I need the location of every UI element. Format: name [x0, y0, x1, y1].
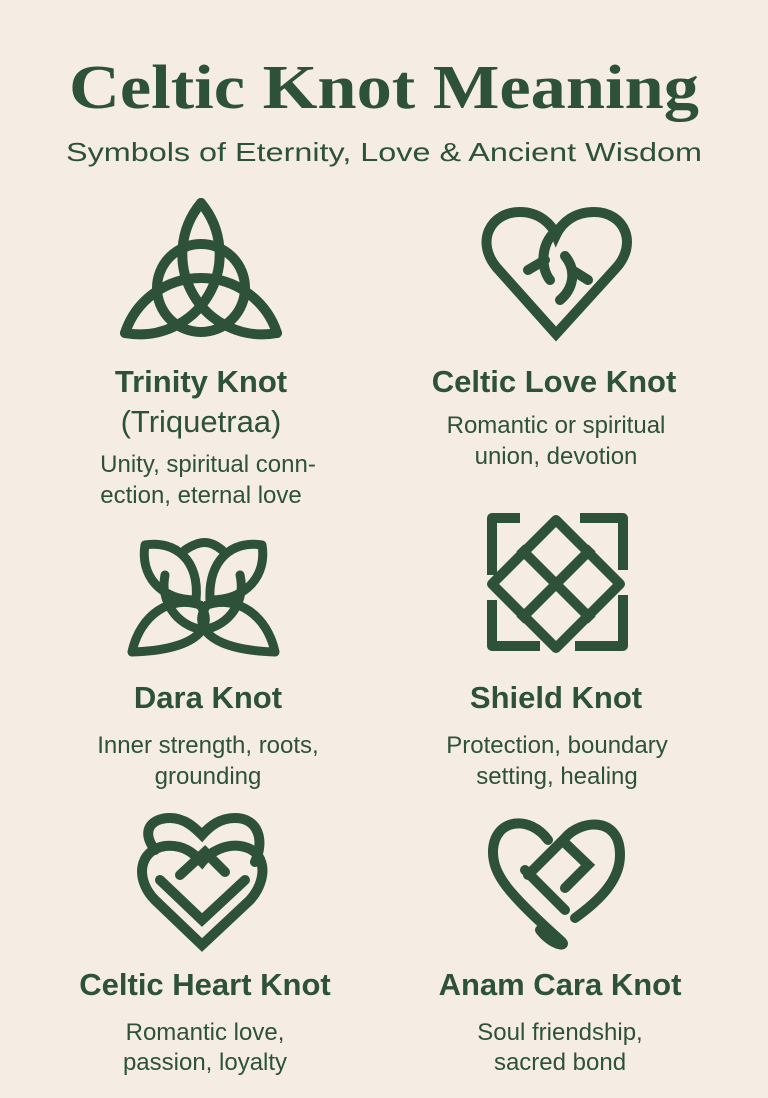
text: celtic love knot: Celtic Love Knot [432, 364, 676, 399]
icon: celtic heart knot [142, 818, 262, 945]
subtitle: Symbols of Eternity, Love & Ancient Wisdom [66, 137, 702, 167]
text: trinity knot: ection, eternal love [100, 482, 302, 509]
text: anam cara knot: Anam Cara Knot [439, 967, 681, 1002]
text: shield knot [446, 680, 668, 790]
icon: dara knot [132, 542, 275, 652]
text: anam cara knot: sacred bond [494, 1049, 626, 1076]
text: anam cara knot: Soul friendship, [477, 1019, 643, 1046]
text: trinity knot [100, 364, 316, 509]
text: dara knot: Dara Knot [134, 680, 282, 715]
text: trinity knot: (Triquetraa) [121, 404, 281, 439]
text: dara knot: Inner strength, roots, [97, 732, 319, 759]
text: dara knot: grounding [155, 763, 261, 790]
text: celtic heart knot [79, 967, 331, 1076]
text: trinity knot: Trinity Knot [115, 364, 287, 399]
text: shield knot: Shield Knot [470, 680, 642, 715]
text: celtic love knot: Romantic or spiritual [447, 412, 665, 439]
text: celtic heart knot: passion, loyalty [123, 1049, 287, 1076]
icon: celtic love knot [487, 212, 627, 334]
text: trinity knot: Unity, spiritual conn- [100, 451, 316, 478]
text: celtic heart knot: Celtic Heart Knot [79, 967, 331, 1002]
title: Celtic Knot Meaning [69, 54, 699, 122]
text: anam cara knot [439, 967, 681, 1076]
text: celtic love knot: union, devotion [475, 443, 637, 470]
text: celtic love knot [432, 364, 676, 470]
text: dara knot [97, 680, 319, 790]
text: celtic heart knot: Romantic love, [126, 1019, 284, 1046]
text: shield knot: setting, healing [476, 763, 638, 790]
icon: anam cara knot [493, 823, 620, 945]
icon: shield knot [492, 518, 623, 648]
icon: trinity knot [125, 203, 277, 334]
text: shield knot: Protection, boundary [446, 732, 668, 759]
